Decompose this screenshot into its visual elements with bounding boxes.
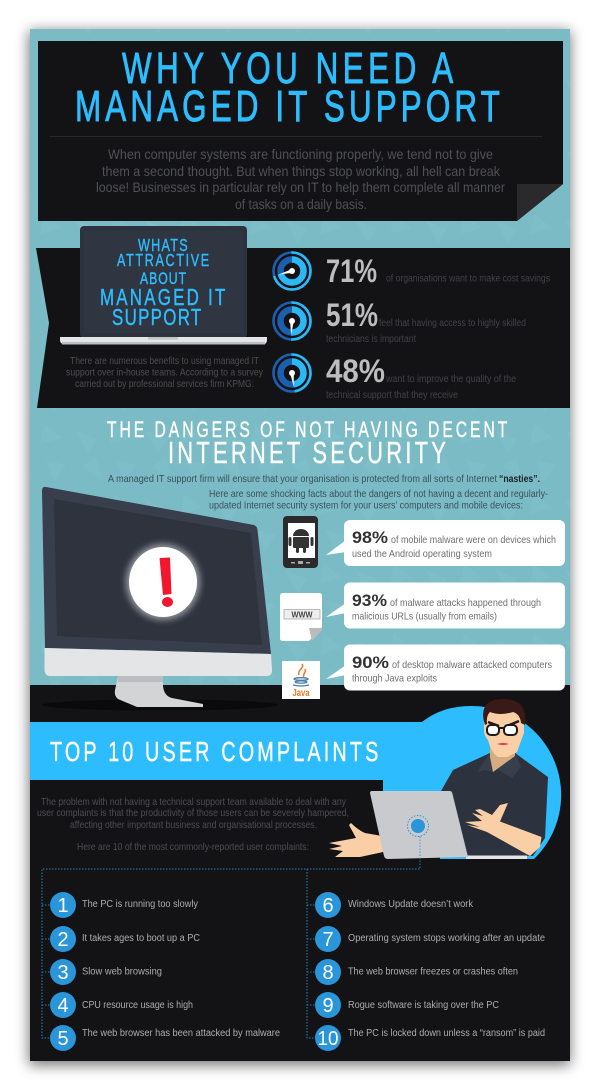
laptop heading: WHATS bbox=[138, 236, 188, 256]
item 2 bbox=[50, 926, 200, 952]
icon: java bbox=[282, 661, 320, 699]
callout: 98%: used the Android operating system bbox=[352, 548, 492, 560]
stat: 51%: 51% bbox=[326, 297, 378, 333]
android robot bbox=[288, 529, 314, 553]
item 9: 9 bbox=[322, 995, 334, 1017]
stat: 71%: of organisations want to make cost savings bbox=[386, 274, 550, 284]
icon: www document bbox=[280, 593, 322, 641]
laptop heading: ATTRACTIVE bbox=[117, 251, 209, 271]
list: complaints 6-10 bbox=[315, 892, 545, 1051]
laptop base bbox=[466, 856, 527, 859]
icon: java: Java bbox=[292, 688, 310, 699]
item 10: The PC is locked down unless a “ransom” is paid bbox=[348, 1028, 545, 1039]
monitor body bbox=[42, 487, 271, 654]
item 1: 1 bbox=[57, 895, 69, 917]
callout: 93%: malicious URLs (usually from emails) bbox=[352, 610, 497, 622]
laptop lid bbox=[370, 791, 468, 859]
dangers intro text: Here are some shocking facts about the dangers of not having a decent and regularly- bbox=[209, 488, 548, 500]
icon: laptop bbox=[60, 226, 267, 344]
item 6 bbox=[315, 892, 474, 918]
stat: 48%: 48% bbox=[326, 353, 385, 389]
monitor shadow bbox=[42, 700, 278, 710]
item 5 bbox=[50, 1025, 280, 1051]
icon: desktop monitor bbox=[42, 487, 278, 710]
laptop heading: MANAGED IT bbox=[100, 284, 226, 311]
item 4: 4 bbox=[57, 995, 69, 1017]
item 6: Windows Update doesn’t work bbox=[348, 899, 474, 910]
survey text: carried out by professional services firm KPMG: bbox=[75, 378, 254, 390]
banner: top 10 user complaints bbox=[30, 706, 561, 859]
laptop heading: ABOUT bbox=[140, 270, 186, 289]
item 1 bbox=[50, 892, 198, 918]
item 3: 3 bbox=[57, 962, 69, 984]
panel: header bbox=[38, 41, 563, 221]
item 4: CPU resource usage is high bbox=[82, 1000, 193, 1011]
item 5: The web browser has been attacked by malware bbox=[82, 1028, 280, 1039]
intro text: loose! Businesses in particular rely on IT to help them complete all manner bbox=[96, 179, 505, 195]
dangers intro text: A managed IT support firm will ensure that your organisation is protected from all sorts of Internet bbox=[108, 473, 497, 485]
brows bbox=[488, 721, 519, 726]
item 7: 7 bbox=[322, 929, 334, 951]
callout: 90%: through Java exploits bbox=[352, 672, 437, 684]
laptop logo bbox=[408, 816, 428, 836]
laptop heading: SUPPORT bbox=[112, 304, 202, 331]
heading: dangers bbox=[107, 419, 508, 470]
hair bbox=[483, 699, 525, 725]
stat: 48% bbox=[326, 353, 516, 401]
item 3 bbox=[50, 959, 162, 985]
item 10 bbox=[315, 1025, 545, 1051]
callout: 98% bbox=[326, 520, 565, 566]
heading: dangers: INTERNET SECURITY bbox=[168, 435, 446, 470]
item 2: 2 bbox=[57, 929, 69, 951]
item 7: Operating system stops working after an update bbox=[348, 933, 545, 944]
dangers intro text: updated Internet security system for your users’ computers and mobile devices: bbox=[209, 500, 523, 512]
right arm bbox=[465, 803, 542, 856]
stat: 71%: 71% bbox=[326, 253, 377, 289]
stat: 71% bbox=[326, 253, 550, 289]
complaints intro text: user complaints is that the productivity of those users can be severely hampered, bbox=[37, 807, 349, 819]
item 10: 10 bbox=[318, 1028, 338, 1050]
icon: www document: WWW bbox=[292, 610, 313, 620]
item 5: 5 bbox=[57, 1028, 69, 1050]
gauge: 51% bbox=[274, 302, 310, 340]
complaints intro text bbox=[37, 796, 349, 853]
monitor stand bbox=[115, 676, 203, 707]
callout: 93% bbox=[326, 582, 565, 628]
callout: 90% bbox=[326, 644, 565, 690]
item 8: The web browser freezes or crashes often bbox=[348, 966, 518, 978]
neck bbox=[490, 745, 515, 772]
page fold bbox=[517, 184, 563, 221]
stat: 48%: want to improve the quality of the bbox=[385, 374, 516, 385]
panel: dark lower background bbox=[30, 685, 570, 1061]
intro text bbox=[96, 146, 505, 212]
banner: top 10 user complaints: TOP 10 USER COMPLAINTS bbox=[50, 737, 378, 768]
complaints intro text: affecting other important business and organisational processes. bbox=[70, 819, 317, 831]
item 1: The PC is running too slowly bbox=[82, 899, 198, 910]
callout: 90%: 90% bbox=[352, 653, 389, 672]
alert glow bbox=[126, 544, 200, 620]
survey text: There are numerous benefits to using managed IT bbox=[70, 355, 259, 367]
mouth bbox=[497, 743, 509, 745]
title: WHY YOU NEED A bbox=[122, 45, 454, 93]
stat: 51% bbox=[326, 297, 526, 345]
complaints intro text: The problem with not having a technical support team available to deal with any bbox=[41, 796, 347, 808]
icon: phone android bbox=[283, 516, 318, 568]
title bbox=[75, 45, 500, 131]
callout: 93%: 93% bbox=[352, 591, 387, 610]
connector: dotted lines bbox=[42, 836, 420, 1038]
glasses bbox=[487, 725, 517, 735]
intro text: them a second thought. But when things stop working, all hell can break bbox=[102, 163, 501, 179]
item 8 bbox=[315, 959, 518, 985]
item 4 bbox=[50, 992, 193, 1018]
panel: teal background bbox=[30, 29, 570, 689]
survey text bbox=[66, 355, 264, 390]
item 6: 6 bbox=[322, 895, 334, 917]
dangers intro text: “nasties”. bbox=[499, 473, 540, 485]
item 3: Slow web browsing bbox=[82, 966, 162, 978]
laptop heading bbox=[100, 236, 226, 331]
item 8: 8 bbox=[322, 962, 334, 984]
stat: 51%: technicians is important bbox=[326, 334, 416, 345]
gauge: 71% bbox=[274, 252, 310, 290]
gauge: 48% bbox=[274, 354, 310, 392]
stat: 48%: technical support that they receive bbox=[326, 390, 458, 401]
title: MANAGED IT SUPPORT bbox=[75, 83, 500, 131]
callout: 98%: of mobile malware were on devices which bbox=[391, 534, 556, 546]
item 9: Rogue software is taking over the PC bbox=[348, 1000, 499, 1011]
face bbox=[484, 710, 524, 757]
panel: what's attractive bbox=[36, 226, 570, 408]
callout: 98%: 98% bbox=[352, 528, 388, 547]
callout: 90%: of desktop malware attacked computers bbox=[392, 659, 552, 671]
item 7 bbox=[315, 926, 545, 952]
complaints intro text: Here are 10 of the most commonly-reported user complaints: bbox=[77, 841, 309, 853]
heading: dangers: THE DANGERS OF NOT HAVING DECENT bbox=[107, 419, 508, 443]
survey text: support over in-house teams. According to a survey bbox=[66, 366, 264, 378]
shirt bbox=[441, 753, 548, 856]
intro text: of tasks on a daily basis. bbox=[235, 196, 367, 212]
item 2: It takes ages to boot up a PC bbox=[82, 933, 200, 944]
left hand bbox=[329, 823, 383, 857]
intro text: When computer systems are functioning properly, we tend not to give bbox=[108, 146, 493, 162]
item 9 bbox=[315, 992, 499, 1018]
stat: 51%: feel that having access to highly skilled bbox=[379, 318, 526, 329]
list: complaints 1-5 bbox=[50, 892, 280, 1051]
illustration: frustrated man with laptop bbox=[329, 699, 548, 859]
dangers intro text bbox=[108, 473, 548, 512]
alert icon bbox=[129, 547, 197, 617]
callout: 93%: of malware attacks happened through bbox=[390, 597, 541, 609]
